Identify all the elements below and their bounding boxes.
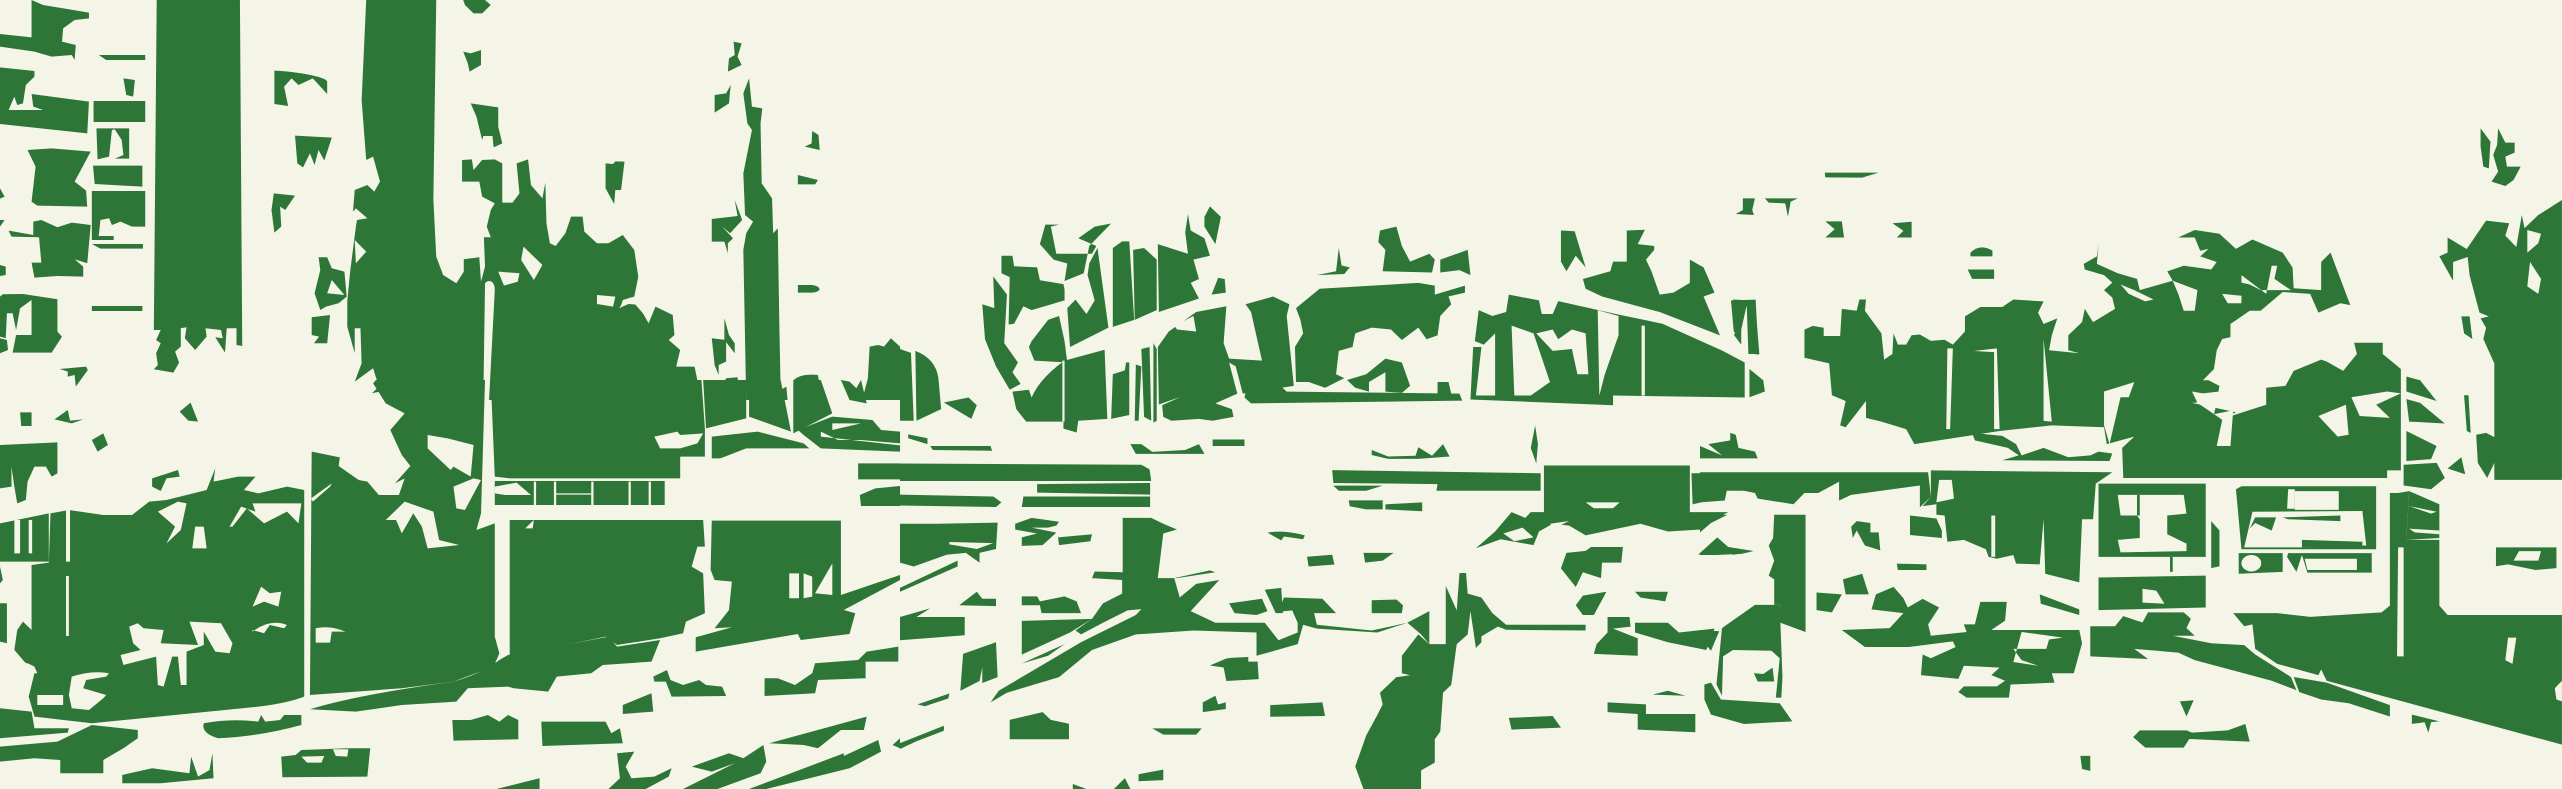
bus window details xyxy=(2137,495,2362,547)
bridge, trees and central road xyxy=(900,206,1760,789)
buses, trees and pavement, right side xyxy=(1700,200,2562,771)
hedges, canopy and road, lower left xyxy=(0,380,900,789)
small sky marks, upper right xyxy=(1736,128,2521,217)
towers and trees, upper left xyxy=(0,0,900,400)
